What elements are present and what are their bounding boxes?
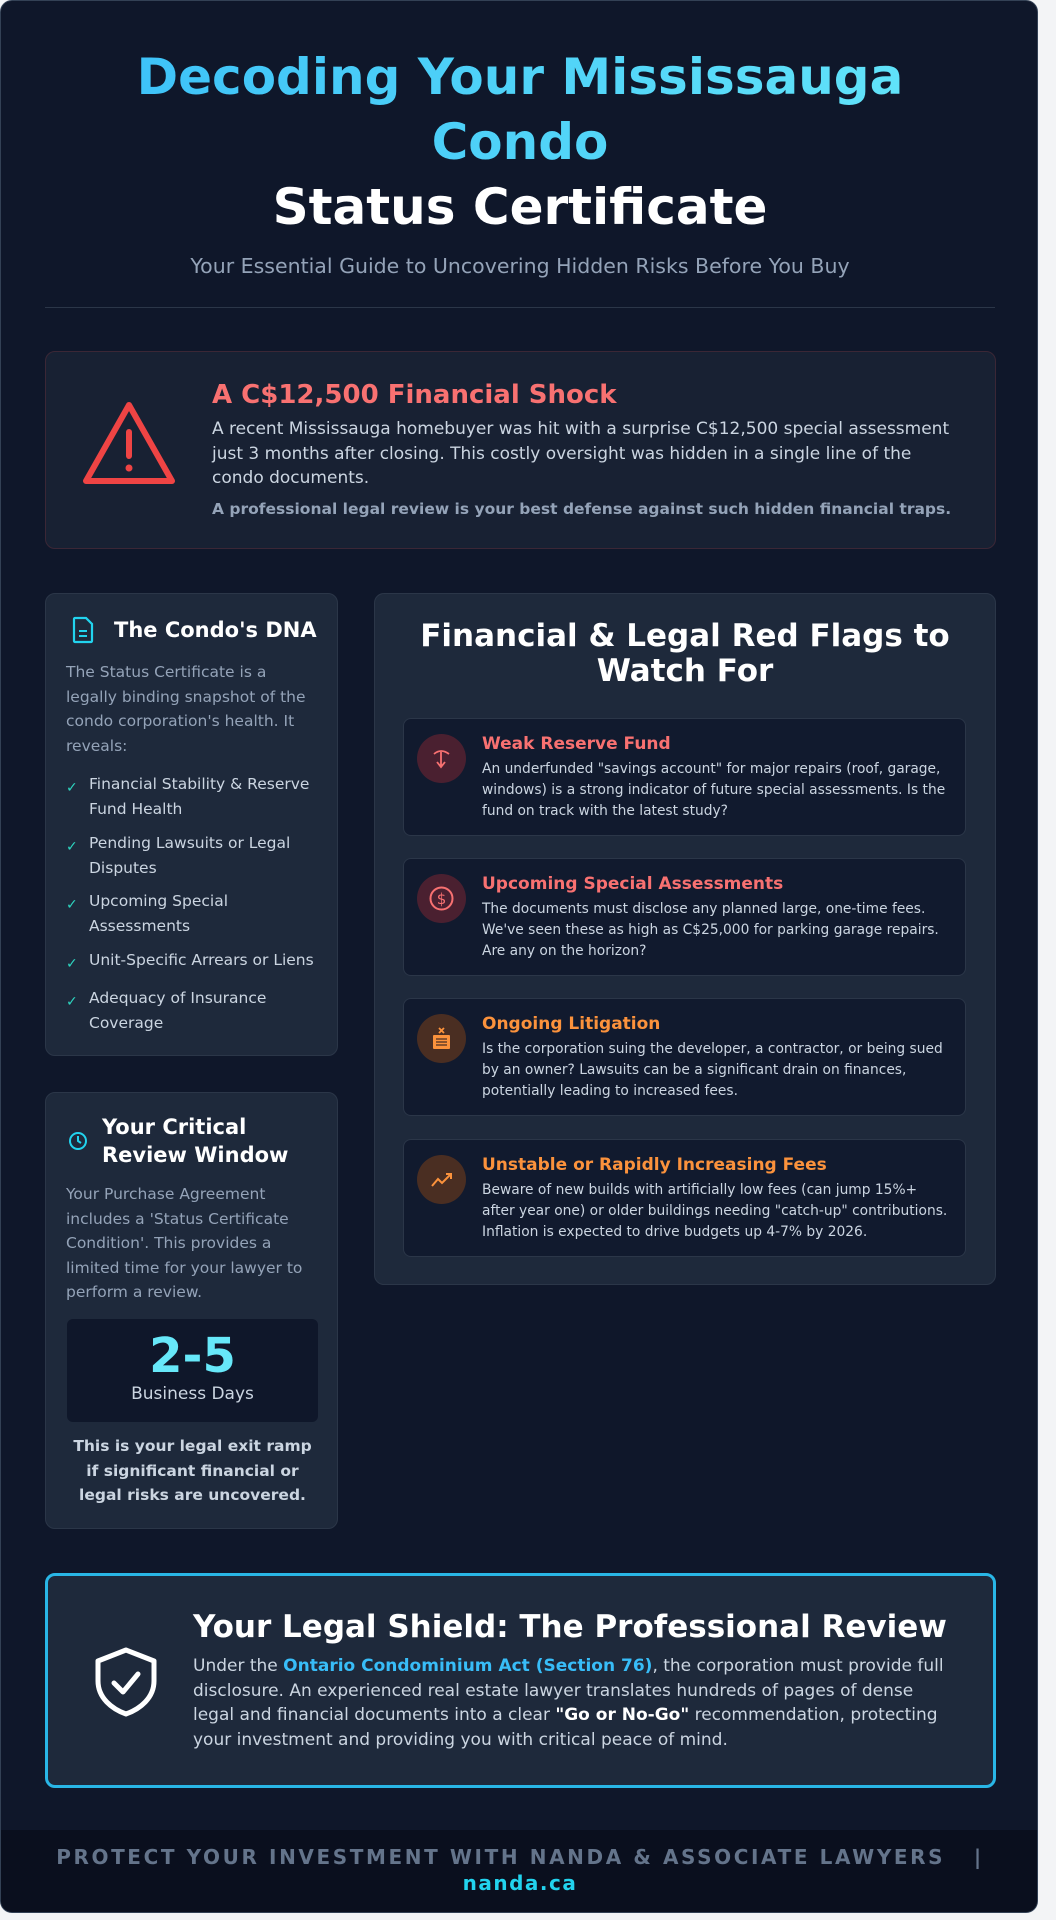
- panel: review window: [45, 1092, 338, 1529]
- subtitle: Your Essential Guide to Uncovering Hidden Risks Before You Buy: [190, 254, 850, 278]
- flag: weak reserve fund: An underfunded "savings account" for major repairs (roof, garage, windows) is a strong indicator of future special assessments. Is the fund on track with the latest study?: [482, 761, 945, 819]
- stat: 2-5 business days: 2-5: [149, 1328, 236, 1384]
- DNA checklist: ✓: [66, 994, 78, 1010]
- panel: financial shock alert: [45, 351, 996, 549]
- icon: dollar: [417, 874, 466, 923]
- review note: This is your legal exit ramp if significant financial or legal risks are uncovered.: [73, 1437, 312, 1504]
- flag: litigation: Is the corporation suing the developer, a contractor, or being sued by an owner? Lawsuits can be a significant drain on finances, potentially leading to increased fees.: [482, 1041, 943, 1099]
- flag: special assessments: [403, 858, 966, 976]
- DNA checklist: ✓: [66, 897, 78, 913]
- panel: condo DNA: [45, 593, 338, 1056]
- title: Status Certificate: [273, 178, 767, 236]
- review text: Your Purchase Agreement includes a 'Status Certificate Condition'. This provides a limited time for your lawyer to perform a review.: [66, 1185, 302, 1301]
- DNA checklist: Financial Stability & Reserve Fund Health: [89, 775, 309, 818]
- flag: fees: Unstable or Rapidly Increasing Fees: [482, 1155, 827, 1175]
- flag: special assessments: Upcoming Special Assessments: [482, 874, 783, 894]
- review heading: [102, 1115, 288, 1167]
- flag: litigation: Ongoing Litigation: [482, 1014, 660, 1034]
- alert body: A recent Mississauga homebuyer was hit with a surprise C$12,500 special assessment just 3 months after closing. This costly oversight was hidden in a single line of the condo documents.: [212, 419, 949, 488]
- icon: clock: [69, 1132, 87, 1150]
- panel: red flags: [374, 593, 996, 1285]
- icon: reserve: [417, 734, 466, 783]
- footer: nanda.ca: [463, 1871, 577, 1895]
- panel: legal shield: [45, 1573, 996, 1788]
- DNA intro: The Status Certificate is a legally binding snapshot of the condo corporation's health. It reveals:: [66, 663, 306, 754]
- title: Condo: [432, 113, 608, 171]
- icon: document: [72, 616, 94, 644]
- flag: fees: after year one) or older buildings needing "catch-up" contributions. Inflation is expected to drive budgets up 4-7% by 2026.: [482, 1203, 947, 1240]
- title: Decoding Your Mississauga: [137, 48, 903, 106]
- DNA checklist: ✓: [66, 956, 78, 972]
- DNA checklist: ✓: [66, 839, 78, 855]
- red flags heading: Financial & Legal Red Flags to: [420, 618, 950, 654]
- alert note: A professional legal review is your best defense against such hidden financial traps.: [212, 500, 951, 518]
- shield body: Under the Ontario Condominium Act (Section 76), the corporation must provide full disclosure. An experienced real estate lawyer translates hundreds of pages of dense legal and financial documents into a clear "Go or No-Go" recommendation, protecting your investment and providing you with critical peace of mind.: [193, 1656, 944, 1750]
- alert heading: A C$12,500 Financial Shock: [212, 380, 617, 410]
- DNA checklist: Upcoming Special Assessments: [89, 892, 228, 934]
- red flags heading: [420, 618, 950, 689]
- DNA checklist: [66, 775, 314, 1032]
- DNA checklist: Pending Lawsuits or Legal Disputes: [89, 834, 290, 876]
- title: [137, 48, 903, 236]
- red flags heading: Watch For: [597, 653, 773, 689]
- stat: 2-5 business days: Business Days: [131, 1384, 254, 1404]
- shield heading: Your Legal Shield: The Professional Review: [193, 1609, 947, 1645]
- DNA heading: The Condo's DNA: [114, 618, 317, 642]
- icon: gavel/doc: [417, 1014, 466, 1063]
- flag: special assessments: The documents must disclose any planned large, one-time fees. We've seen these as high as C$25,000 for parking garage repairs. Are any on the horizon?: [482, 901, 939, 959]
- flag: litigation: [403, 998, 966, 1116]
- DNA checklist: Adequacy of Insurance Coverage: [89, 989, 266, 1032]
- icon: warning triangle: [83, 402, 175, 484]
- flag: fees: [403, 1139, 966, 1257]
- review heading: Review Window: [102, 1143, 288, 1167]
- flag: weak reserve fund: Weak Reserve Fund: [482, 734, 671, 754]
- flag: fees: Beware of new builds with artificially low fees (can jump 15%+: [482, 1182, 917, 1198]
- footer: [1, 1830, 1039, 1914]
- icon: dollar: $: [437, 890, 446, 908]
- review heading: Your Critical: [102, 1115, 246, 1139]
- icon: shield: [96, 1648, 156, 1716]
- flag: weak reserve fund: [403, 718, 966, 836]
- DNA checklist: Unit-Specific Arrears or Liens: [89, 951, 314, 969]
- icon: trend up: [417, 1155, 466, 1204]
- stat: 2-5 business days: [67, 1319, 318, 1422]
- footer: PROTECT YOUR INVESTMENT WITH NANDA & ASSOCIATE LAWYERS |: [56, 1845, 984, 1869]
- DNA checklist: ✓: [66, 780, 78, 796]
